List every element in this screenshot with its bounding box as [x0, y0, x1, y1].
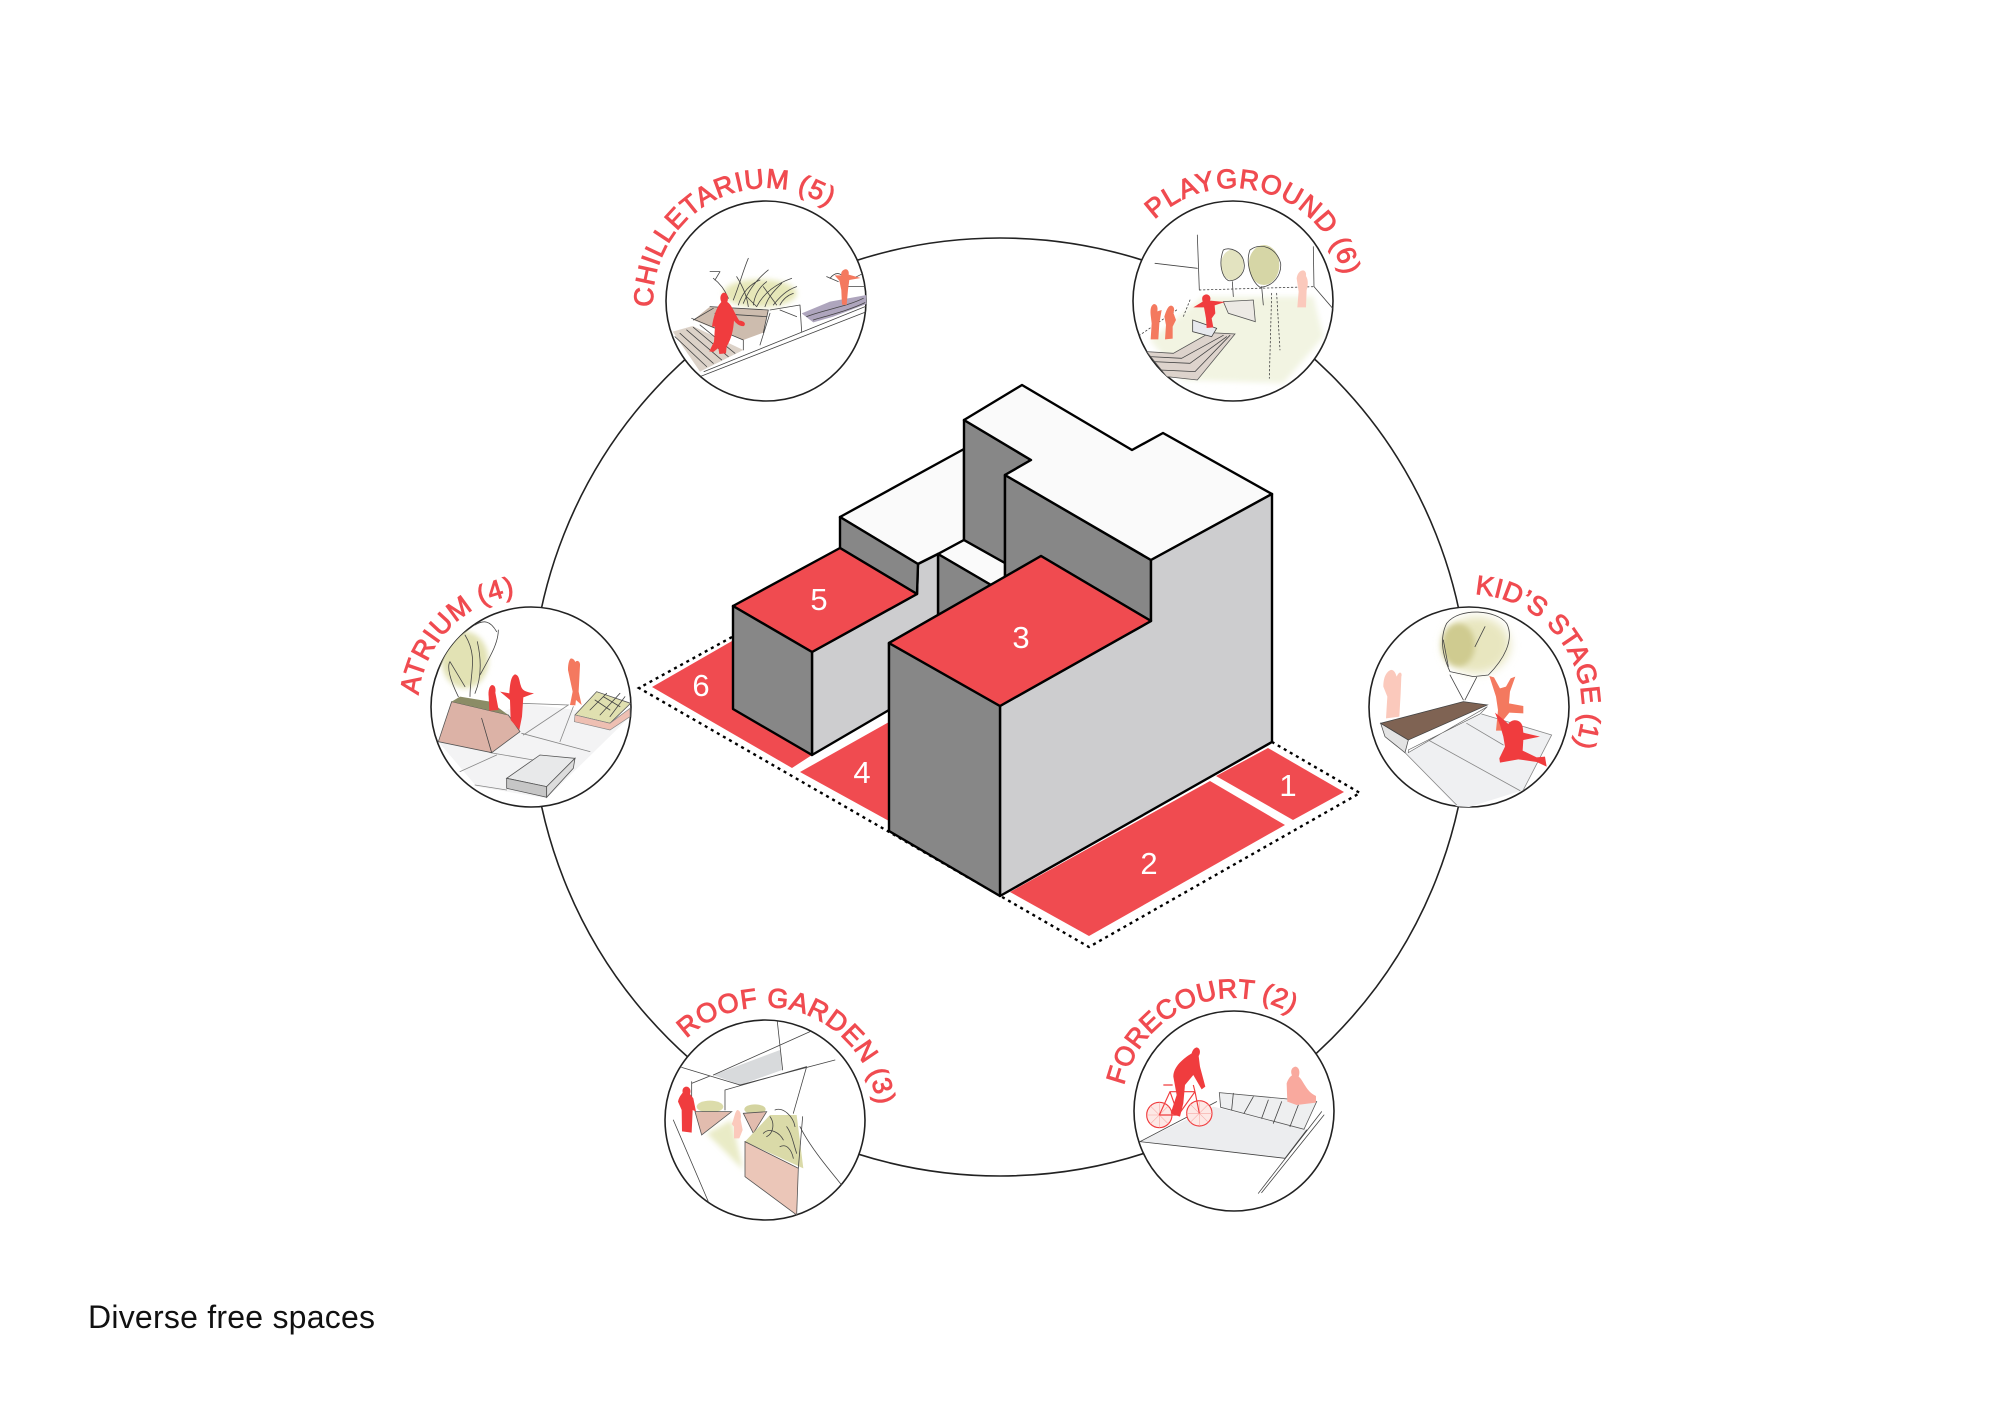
- zone 4: [800, 722, 889, 821]
- sketch: [673, 1022, 842, 1215]
- zone numbers: 1: [1279, 768, 1297, 803]
- vignette: chilletarium: [634, 168, 867, 402]
- label: CHILLETARIUM (5): [634, 168, 834, 306]
- courtyard wall: [938, 554, 991, 615]
- zone numbers: 4: [853, 755, 871, 790]
- sketch: [1140, 235, 1333, 383]
- isometric building: [733, 385, 1272, 896]
- main dark face: [889, 643, 1000, 896]
- sketch: [1381, 612, 1552, 807]
- red roof 5: [733, 548, 917, 652]
- vignette: forecourt: [1106, 978, 1335, 1212]
- sketch: [1140, 1047, 1324, 1193]
- zone numbers: 5: [810, 582, 828, 617]
- vignette: kid's stage: [1368, 575, 1602, 808]
- site plan with red ground zones: [639, 637, 1360, 947]
- zone numbers: [692, 582, 1297, 881]
- connecting ring: [531, 238, 1469, 1176]
- sketch: [438, 622, 631, 798]
- label: KID’S STAGE (1): [1476, 575, 1602, 748]
- red roof 3: [889, 556, 1151, 706]
- dashed site boundary: [639, 637, 1360, 947]
- tower inner wall: [964, 420, 1031, 563]
- tower back wall: [1005, 475, 1151, 621]
- label: ATRIUM (4): [400, 576, 512, 696]
- vignette: playground: [1132, 168, 1361, 402]
- circle: [1369, 607, 1569, 807]
- circle: [431, 607, 631, 807]
- rear left roof: [840, 449, 964, 564]
- dark face of lower wing: [733, 606, 812, 755]
- courtyard: [938, 540, 1005, 585]
- circle: [666, 201, 866, 401]
- circle: [665, 1020, 865, 1220]
- zone 1: [1216, 748, 1344, 820]
- vignette: roof garden: [664, 988, 896, 1221]
- zone numbers: 6: [692, 668, 710, 703]
- label: PLAYGROUND (6): [1144, 168, 1361, 273]
- sketch: [673, 258, 867, 377]
- zone 2: [1010, 781, 1285, 936]
- vignette: atrium: [400, 576, 632, 808]
- caption: Diverse free spaces: [88, 1299, 375, 1335]
- zone 6: [652, 641, 812, 768]
- zone numbers: 2: [1140, 846, 1158, 881]
- tower roof: [964, 385, 1272, 560]
- circle: [1134, 1011, 1334, 1211]
- dark wall below rear roof: [840, 517, 918, 594]
- label: FORECOURT (2): [1106, 978, 1296, 1084]
- label: ROOF GARDEN (3): [676, 988, 896, 1103]
- zone numbers: 3: [1012, 620, 1030, 655]
- circle: [1133, 201, 1333, 401]
- main light face: [1000, 494, 1272, 896]
- light wall of lower wing: [812, 554, 938, 755]
